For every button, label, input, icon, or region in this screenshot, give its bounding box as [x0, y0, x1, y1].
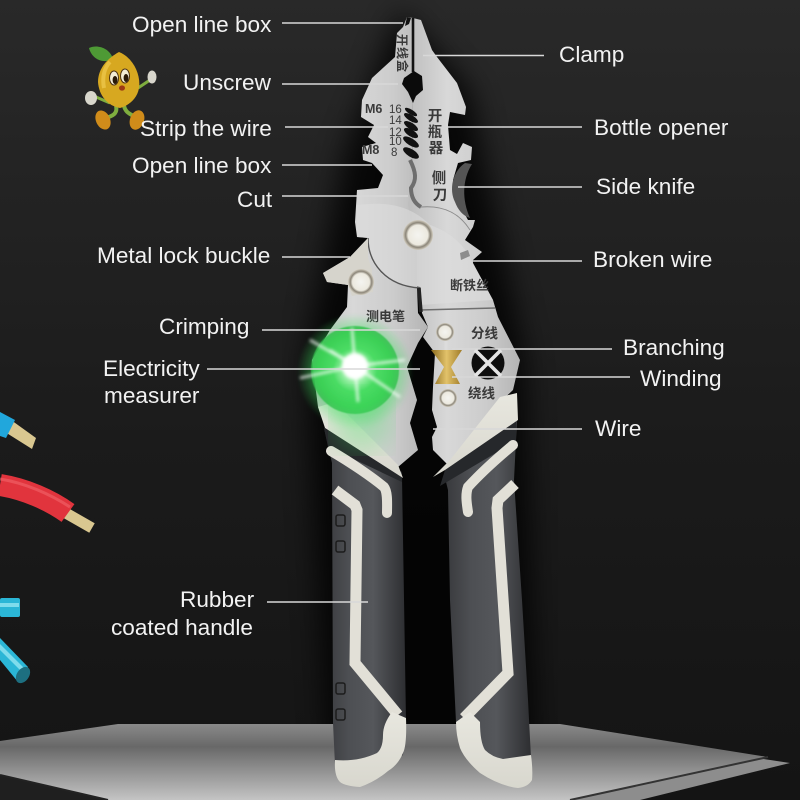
brass connector	[431, 323, 462, 407]
strip sizes: 10	[389, 136, 402, 148]
notch in broken wire hole	[460, 250, 470, 260]
pliers	[312, 17, 532, 788]
stripping holes	[401, 106, 421, 161]
label: metal lock buckle: Metal lock buckle	[97, 243, 270, 268]
strip sizes: 16	[389, 104, 402, 116]
seam lines	[420, 308, 495, 310]
label: wire: Wire	[595, 416, 641, 441]
label: strip the wire: Strip the wire	[140, 116, 272, 141]
label: rubber coated handle: Rubber	[180, 587, 255, 612]
lock buckle	[323, 238, 373, 296]
floor plate	[0, 724, 790, 800]
label: branching: Branching	[623, 335, 725, 360]
right handle	[433, 393, 532, 788]
strip sizes: 14	[389, 115, 402, 127]
left handle	[318, 402, 406, 787]
jaw slit	[412, 18, 414, 72]
side knife dark recess	[452, 163, 472, 218]
engraved text: bottle opener	[428, 109, 444, 157]
label: electricity measurer: Electricity	[103, 356, 200, 381]
label: crimping: Crimping	[159, 314, 249, 339]
buckle rivet	[348, 269, 374, 295]
icon: lemon mascot	[85, 46, 156, 132]
engraved text: electricity measurer: 测电笔	[366, 309, 405, 324]
engraved text: side knife: 刀	[433, 188, 447, 204]
label: clamp: Clamp	[559, 42, 624, 67]
engraved text: broken wire: 断铁丝	[450, 278, 489, 293]
annotation lines	[207, 23, 630, 602]
strip sizes	[362, 102, 402, 159]
label: unscrew: Unscrew	[183, 70, 272, 95]
label: open line box lower: Open line box	[132, 153, 272, 178]
engraved text: side knife	[432, 170, 447, 204]
strip sizes: 12	[389, 127, 402, 139]
cross hole	[472, 346, 504, 380]
engraved text: bottle opener: 开	[428, 109, 442, 125]
label: side knife: Side knife	[596, 174, 695, 199]
label: rubber coated handle: coated handle	[111, 615, 253, 640]
engraved text: bottle opener: 瓶	[428, 124, 442, 141]
wires: cable decorations on the left	[0, 412, 92, 686]
label: electricity measurer	[103, 356, 200, 408]
label: broken wire: Broken wire	[593, 247, 712, 272]
hex hole	[402, 71, 423, 103]
engraved text: open line box: 开线盒	[395, 34, 410, 73]
strip sizes: M8	[362, 143, 379, 157]
label: electricity measurer: measurer	[104, 383, 200, 408]
lower head lighter plate	[357, 204, 493, 305]
engraved text: branching: 分线	[471, 325, 498, 341]
left jaw and head	[312, 17, 428, 467]
pliers shadow	[305, 10, 535, 780]
cutting edge	[410, 160, 421, 207]
label: rubber coated handle	[111, 587, 255, 640]
strip sizes: 8	[391, 147, 397, 159]
engraved text: side knife: 侧	[432, 170, 446, 187]
pivot rivet	[403, 220, 433, 250]
label: open line box top: Open line box	[132, 12, 272, 37]
right jaw and head	[408, 18, 520, 465]
label: cut: Cut	[237, 187, 273, 212]
strip sizes: M6	[365, 102, 382, 116]
label: winding: Winding	[640, 366, 722, 391]
engraved text: winding: 绕线	[468, 385, 495, 401]
engraved text: bottle opener: 器	[429, 140, 444, 157]
label: bottle opener: Bottle opener	[594, 115, 729, 140]
green glow light	[297, 314, 413, 450]
